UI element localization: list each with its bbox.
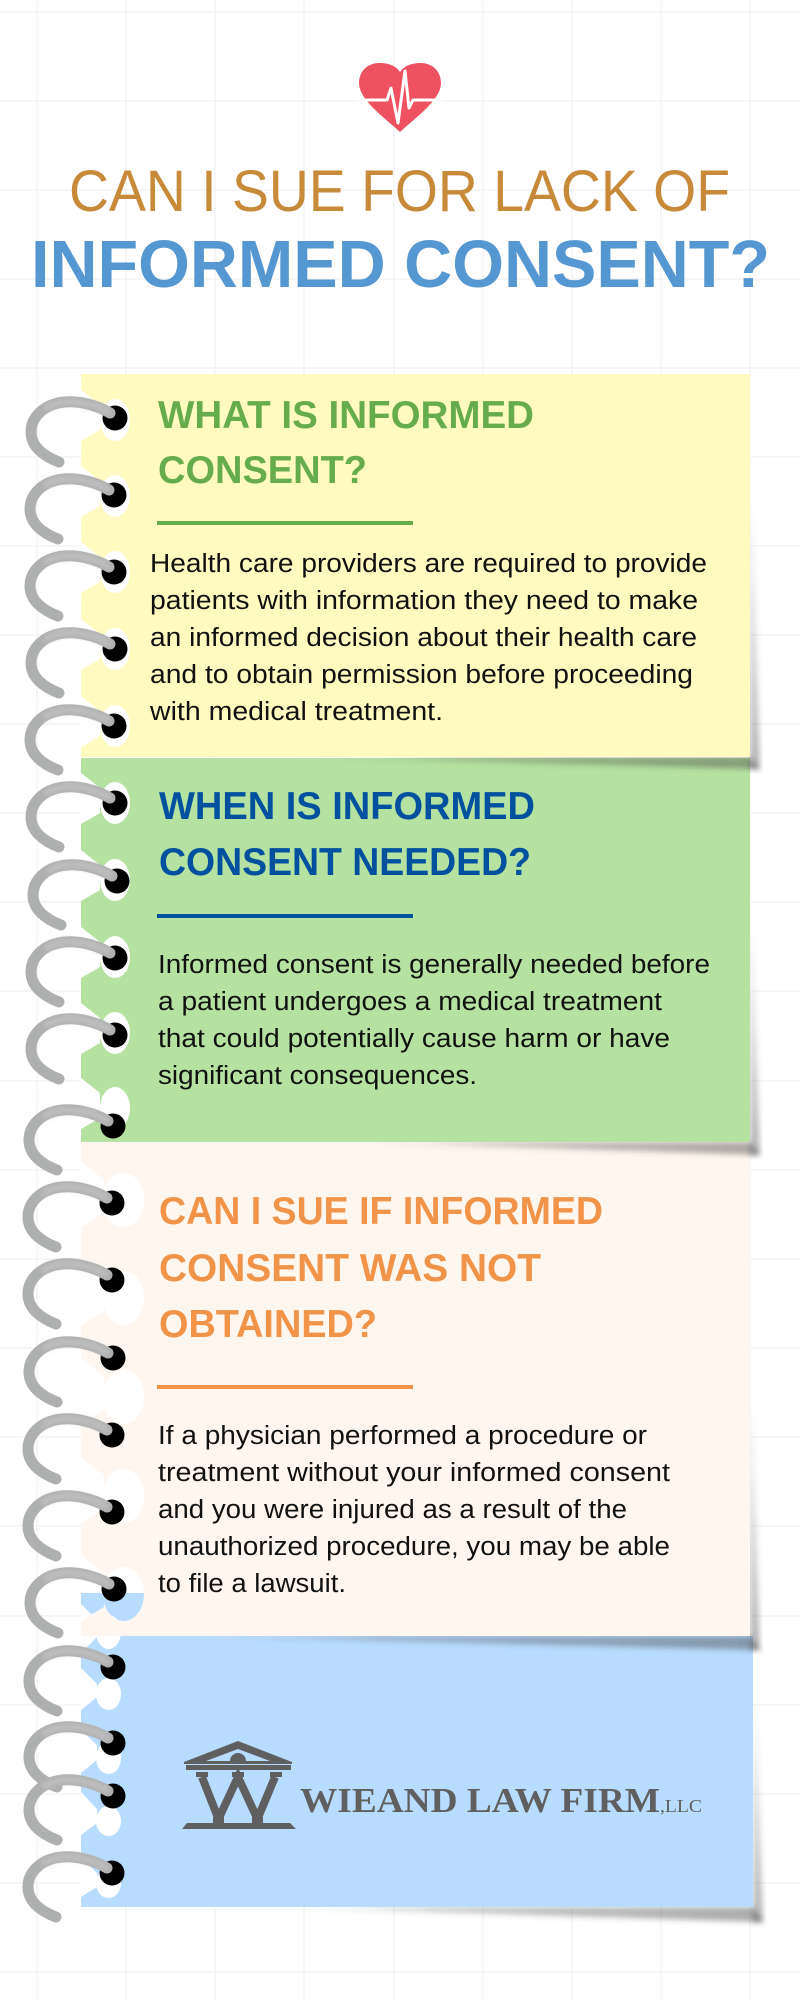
body text: can I sue: to file a lawsuit.	[158, 1570, 346, 1598]
panel: when is informed consent needed	[81, 758, 760, 1155]
body text: can I sue: and you were injured as a result of the	[158, 1496, 627, 1524]
title: INFORMED CONSENT?	[31, 227, 770, 302]
body text: can I sue	[158, 1422, 670, 1598]
body text: what	[149, 550, 707, 726]
icon: heart with pulse line	[358, 63, 442, 132]
heading: when	[159, 785, 535, 884]
panel: law firm logo sheet	[81, 1593, 763, 1922]
heading: can I sue: CAN I SUE IF INFORMED	[159, 1190, 603, 1233]
body text: what: Health care providers are required to provide	[150, 550, 707, 578]
body text: when	[158, 951, 710, 1090]
body text: can I sue: If a physician performed a procedure or	[158, 1422, 648, 1450]
title: CAN I SUE FOR LACK OF	[69, 159, 730, 224]
title	[31, 159, 770, 302]
heading: can I sue: CONSENT WAS NOT	[159, 1247, 541, 1290]
heading: what: CONSENT?	[158, 449, 367, 492]
logo wordmark: WIEAND LAW FIRM	[300, 1781, 660, 1820]
spiral binding rings	[28, 402, 130, 1917]
body text: when: Informed consent is generally needed before	[158, 951, 710, 979]
logo wordmark: ,LLC	[660, 1796, 702, 1816]
panel: can I sue	[81, 1142, 760, 1650]
heading: when: CONSENT NEEDED?	[159, 841, 531, 884]
body text: when: that could potentially cause harm or have	[158, 1025, 670, 1053]
panel: what is informed consent	[81, 374, 760, 769]
body text: what: patients with information they need to make	[150, 587, 698, 615]
heading: can I sue	[159, 1190, 603, 1346]
body text: when: significant consequences.	[158, 1062, 477, 1090]
body text: what: with medical treatment.	[149, 698, 443, 726]
body text: can I sue: unauthorized procedure, you may be able	[158, 1533, 670, 1561]
body text: can I sue: treatment without your informed consent	[158, 1459, 670, 1487]
heading: when: WHEN IS INFORMED	[159, 785, 535, 828]
icon: courthouse W logo	[182, 1741, 296, 1829]
heading: can I sue: OBTAINED?	[159, 1303, 377, 1346]
heading: what: WHAT IS INFORMED	[158, 394, 534, 437]
heading: what	[158, 394, 534, 492]
body text: when: a patient undergoes a medical treatment	[158, 988, 662, 1016]
body text: what: and to obtain permission before proceeding	[150, 661, 693, 689]
body text: what: an informed decision about their health care	[150, 624, 697, 652]
